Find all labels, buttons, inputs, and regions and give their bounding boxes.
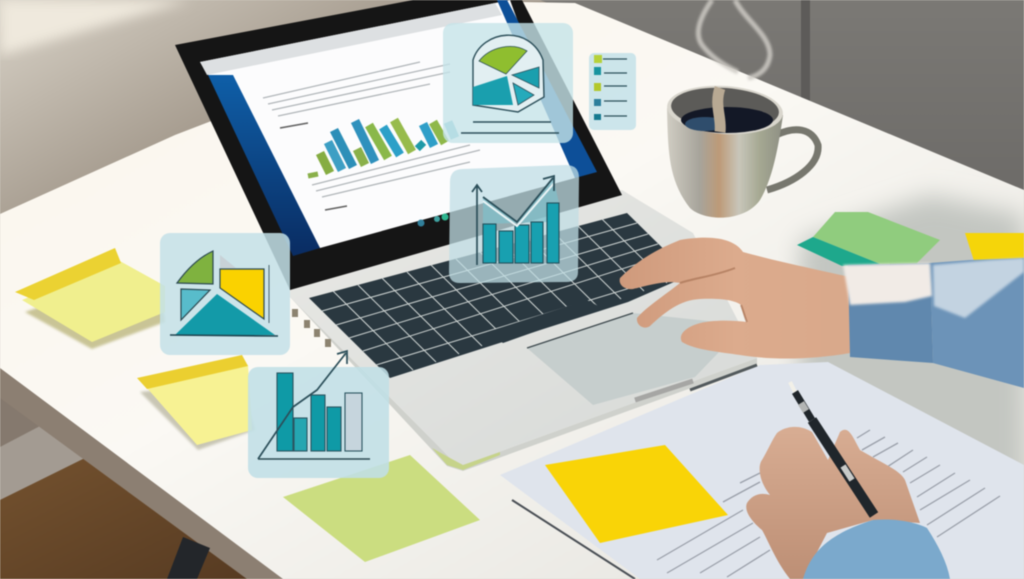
yellow segment <box>220 269 264 319</box>
baseline <box>170 335 278 336</box>
floating panel: area chart card <box>160 233 290 355</box>
hand on trackpad <box>620 238 850 359</box>
lower wall and floor <box>0 368 283 579</box>
screen bar chart <box>308 120 455 176</box>
shirt sleeve and cuff <box>843 258 1024 388</box>
right blue strip <box>497 0 597 178</box>
cup body <box>667 108 783 218</box>
bars <box>277 373 362 451</box>
trackpad top line <box>527 313 633 348</box>
floating panel: bar and trend card <box>248 351 389 478</box>
teal triangle <box>175 294 275 335</box>
keyboard <box>309 213 690 378</box>
vertical arrow axis <box>472 185 482 265</box>
trend arrow <box>258 351 347 459</box>
sleeve highlight <box>933 258 1024 318</box>
sticky note: left yellow <box>15 248 165 349</box>
cup handle <box>767 130 818 190</box>
desk shaded area on right <box>800 195 1024 520</box>
trackpad <box>527 313 745 405</box>
document text lines <box>263 62 480 210</box>
coffee cup <box>665 82 818 218</box>
desk front edge <box>0 368 283 579</box>
cuff highlight <box>843 263 932 305</box>
lower sleeve <box>803 519 950 579</box>
front shadow <box>690 365 757 390</box>
green segment <box>177 251 213 284</box>
light blue segment <box>181 289 210 320</box>
floating panel: pie chart card <box>443 23 573 143</box>
papers on desk <box>500 362 1024 579</box>
axis line <box>258 458 370 460</box>
pen <box>790 382 874 515</box>
space bar <box>487 300 602 343</box>
floating panel: growth chart card <box>449 165 579 283</box>
sticky note: middle yellow <box>137 355 255 450</box>
floating panel: legend card <box>589 53 636 130</box>
right rule <box>268 265 270 323</box>
blue sidebar <box>208 75 320 256</box>
teal right slice <box>512 67 539 88</box>
writing hand <box>746 427 920 579</box>
bars <box>483 203 559 263</box>
screen display <box>200 0 575 248</box>
sticky note: yellow on paper <box>545 445 728 543</box>
laptop <box>175 0 757 471</box>
base underside edge <box>290 292 757 471</box>
toolbar <box>200 3 502 75</box>
taskbar icons <box>418 214 448 226</box>
sticky note: bottom green <box>283 455 480 562</box>
cuff <box>848 263 933 363</box>
steam in cup <box>718 88 720 132</box>
laptop base <box>290 190 757 465</box>
coffee <box>681 107 773 133</box>
caption lines <box>461 122 559 133</box>
screen bezel <box>175 0 622 290</box>
gray sliver <box>220 255 236 268</box>
pale arrow band <box>483 177 559 224</box>
cup rim <box>665 82 785 138</box>
green slice <box>479 46 527 74</box>
teal left slice <box>473 76 513 105</box>
table leg <box>167 537 210 579</box>
sleeve <box>930 258 1024 388</box>
key gaps <box>322 219 669 370</box>
front lip <box>635 381 693 400</box>
zigzag arrow <box>483 182 555 226</box>
pie outline <box>473 35 544 112</box>
laptop ports <box>292 309 331 347</box>
teal small slice <box>513 83 534 105</box>
green tinted corner <box>432 448 500 470</box>
steam <box>698 0 770 78</box>
sticky note: right green <box>797 212 940 266</box>
sticky note: right yellow <box>965 233 1024 264</box>
